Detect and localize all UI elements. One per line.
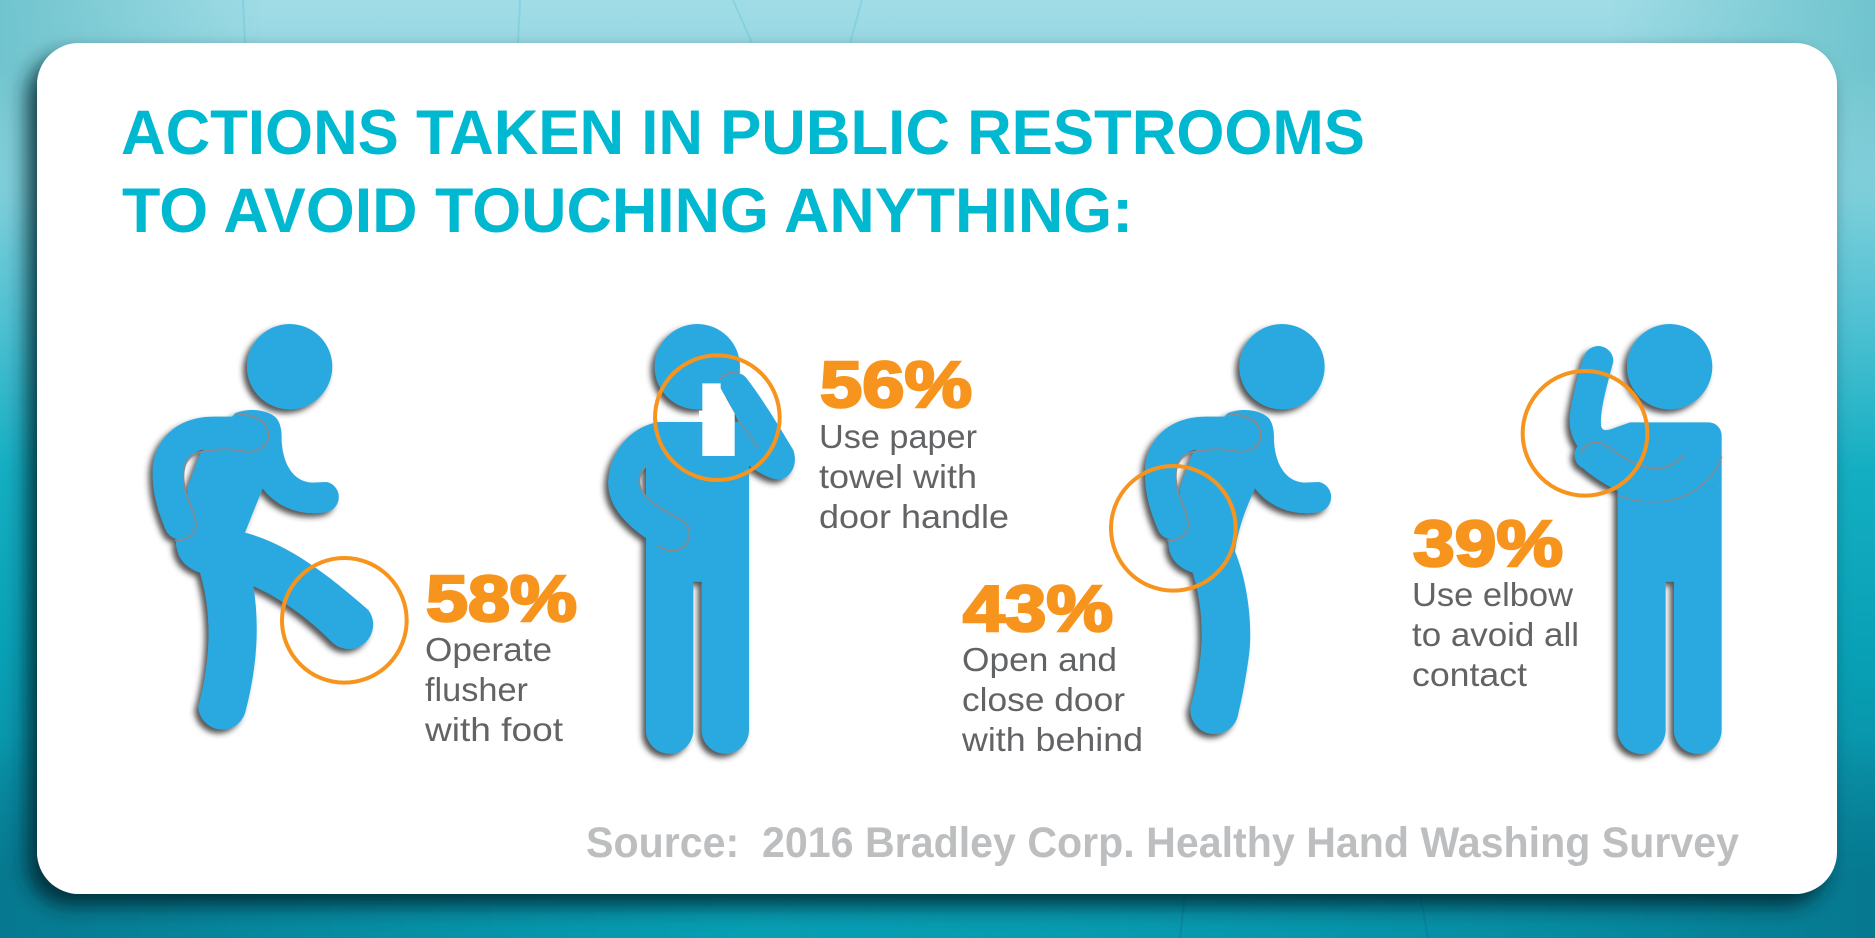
stat: 58%	[424, 562, 577, 748]
stat: 56%	[819, 348, 1009, 535]
stat: 39%: 39%	[1413, 507, 1563, 580]
stat: 43%: with behind	[961, 721, 1143, 758]
figure: using paper towel on door handle	[608, 324, 795, 754]
stat: 43%: Open and	[962, 641, 1117, 678]
stat: 39%: Use elbow	[1412, 576, 1573, 613]
stat: 56%: Use paper	[819, 418, 977, 455]
title: TO AVOID TOUCHING ANYTHING:	[122, 176, 1133, 246]
stat: 43%: close door	[962, 681, 1125, 718]
stat: 58%: flusher	[425, 671, 528, 708]
stat: 58%: Operate	[425, 631, 552, 668]
stat: 56%: 56%	[820, 348, 972, 421]
title	[121, 98, 1365, 246]
stat: 39%: to avoid all	[1412, 616, 1579, 653]
stat: 39%: contact	[1412, 656, 1527, 693]
stat: 58%: 58%	[426, 562, 577, 635]
stat: 56%: door handle	[819, 498, 1009, 535]
stat: 39%	[1412, 507, 1579, 693]
title: ACTIONS TAKEN IN PUBLIC RESTROOMS	[121, 98, 1365, 168]
stat: 43%: 43%	[963, 572, 1113, 645]
figure: opening door with behind	[1111, 324, 1331, 734]
stat: 43%	[961, 572, 1143, 758]
figure: using elbow	[1523, 324, 1722, 754]
stat: 58%: with foot	[424, 711, 563, 748]
source note: Source: 2016 Bradley Corp. Healthy Hand Washing Survey	[586, 819, 1739, 867]
stat: 56%: towel with	[819, 458, 977, 495]
figure: kicking flusher with foot	[153, 324, 407, 730]
